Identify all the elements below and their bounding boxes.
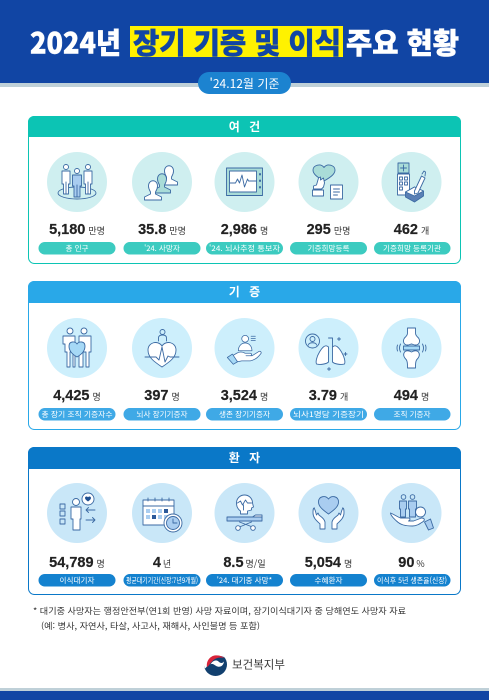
item: 생존 장기기증자 bbox=[206, 318, 283, 420]
label pill: 기증희망등록 bbox=[308, 243, 349, 254]
footnote bbox=[33, 605, 406, 632]
icon: hands and heart bbox=[313, 497, 344, 529]
label pill: '24. 사망자 bbox=[144, 243, 180, 254]
label pill: 기증희망 등록기관 bbox=[383, 243, 441, 254]
label pill: 뇌사 장기기증자 bbox=[136, 409, 188, 420]
item: 총 인구 bbox=[38, 152, 116, 254]
label pill: 총 인구 bbox=[65, 243, 89, 254]
item: 이식후 5년 생존율 bbox=[374, 483, 450, 586]
value: 5,180 만명 bbox=[49, 222, 105, 238]
item: 뇌사1명당 기증장기 bbox=[290, 318, 367, 420]
icon: knee joint bbox=[397, 328, 426, 368]
header band bbox=[0, 0, 489, 87]
title: 2024년 bbox=[30, 20, 121, 62]
title: 주요 현황 bbox=[346, 20, 459, 62]
icon: lungs with person badge bbox=[306, 334, 347, 370]
label pill: 뇌사1명당 기증장기 bbox=[293, 409, 364, 420]
label pill: '24. 대기중 사망* bbox=[217, 575, 273, 586]
value: 3,524 명 bbox=[221, 388, 268, 404]
label pill: 총 장기 조직 기증자수 bbox=[42, 409, 113, 420]
icon: hand holding person bbox=[227, 335, 261, 364]
panel: 환자 bbox=[28, 447, 461, 594]
label pill: 수혜환자 bbox=[315, 575, 342, 586]
item: 총 장기 조직 기증자수 bbox=[38, 318, 116, 420]
footnote: * 대기중 사망자는 행정안전부(연1회 반영) 사망 자료이며, 장기이식대기자 중 당해연도 사망자 자료 bbox=[33, 605, 406, 617]
value: 3.79 개 bbox=[309, 388, 348, 404]
icon: taegeuk bbox=[204, 652, 227, 676]
value: 494 명 bbox=[394, 388, 429, 404]
icon: two people with heart bbox=[63, 328, 91, 367]
label pill: 이식후 5년 생존율(신장) bbox=[377, 575, 447, 586]
heading: 여건: 여 건 bbox=[229, 118, 263, 135]
icon: hospital and pen bbox=[398, 163, 426, 202]
footnote: (예: 병사, 자연사, 타살, 사고사, 재해사, 사인불명 등 포함) bbox=[41, 620, 260, 632]
heading: 기증: 기 증 bbox=[229, 283, 263, 300]
date pill: '24.12월 기준 bbox=[210, 75, 280, 92]
value: 462 개 bbox=[394, 222, 429, 238]
label pill: 평균대기기간(신장:7년9개월) bbox=[126, 575, 198, 586]
label pill: '24. 뇌사추정 통보자 bbox=[209, 243, 280, 254]
item: 수혜환자 bbox=[290, 483, 367, 586]
item: 조직 기증자 bbox=[374, 318, 450, 420]
logo: 보건복지부 bbox=[204, 652, 285, 676]
icon: head and stretcher bbox=[227, 495, 262, 530]
icon: heart with pulse bbox=[145, 330, 179, 367]
item: 대기중 사망 bbox=[206, 483, 283, 586]
value: 2,986 명 bbox=[221, 222, 268, 238]
label pill: 조직 기증자 bbox=[393, 409, 431, 420]
icon: three people bbox=[58, 164, 96, 199]
value: 4,425 명 bbox=[53, 388, 101, 404]
label pill: 이식대기자 bbox=[60, 575, 94, 586]
value: 397 명 bbox=[144, 388, 180, 404]
item: 사망자 bbox=[124, 152, 200, 254]
panel: 여건 bbox=[28, 116, 461, 264]
icon: waiting person with list bbox=[60, 493, 95, 530]
date pill bbox=[198, 72, 291, 94]
item: 평균대기기간 bbox=[124, 483, 200, 586]
icon: calendar and clock bbox=[143, 498, 182, 532]
value: 90% bbox=[398, 555, 425, 571]
item: 기증희망등록 bbox=[290, 152, 367, 254]
panel: 기증 bbox=[28, 281, 461, 430]
icon: silhouettes bbox=[144, 166, 178, 200]
item: 기증희망 등록기관 bbox=[374, 152, 450, 254]
value: 4년 bbox=[153, 555, 171, 571]
value: 5,054 명 bbox=[305, 555, 352, 571]
icon: monitor bbox=[226, 168, 262, 196]
logo: 보건복지부: 보건복지부 bbox=[232, 656, 285, 672]
value: 54,789 명 bbox=[49, 555, 105, 571]
value: 8.5명/일 bbox=[223, 555, 266, 571]
heading: 환자: 환 자 bbox=[229, 449, 263, 466]
title: 장기 기증 및 이식 bbox=[133, 20, 341, 62]
value: 35.8 만명 bbox=[138, 222, 186, 238]
footer band bbox=[0, 688, 489, 700]
item: 뇌사추정 통보자 bbox=[206, 152, 283, 254]
item: 뇌사 장기기증자 bbox=[124, 318, 200, 420]
icon: hand heart document bbox=[312, 165, 342, 199]
value: 295 만명 bbox=[307, 222, 350, 238]
label pill: 생존 장기기증자 bbox=[219, 409, 270, 420]
icon: hand holding people bbox=[390, 495, 434, 530]
item: 이식대기자 bbox=[38, 483, 116, 586]
title bbox=[30, 20, 459, 62]
